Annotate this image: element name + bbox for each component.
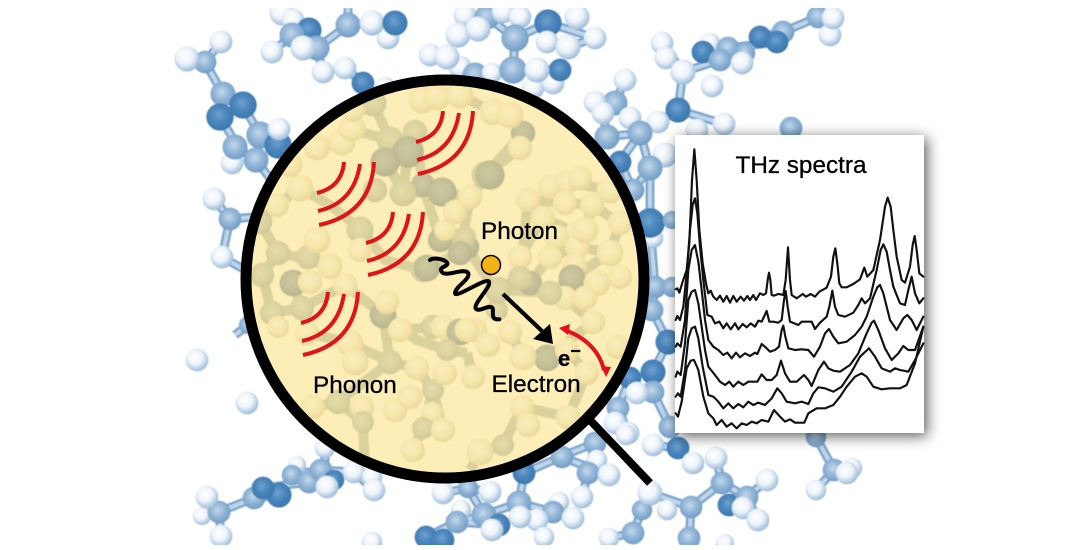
wave group middle xyxy=(366,212,423,275)
wave group top xyxy=(416,111,473,174)
icon: photon wavy line xyxy=(430,259,499,319)
label: electron symbol: e xyxy=(558,346,570,371)
label: Phonon: Phonon xyxy=(313,372,397,399)
magnifier lens xyxy=(246,80,644,478)
panel: THz spectra xyxy=(675,135,924,433)
lens ring xyxy=(246,80,644,478)
magnified molecule xyxy=(248,82,632,470)
arrow: red double-headed curved xyxy=(559,324,611,377)
chart: six stacked spectra lines xyxy=(676,149,923,428)
icon: photon ball xyxy=(482,256,500,274)
wave group bottom xyxy=(301,292,358,355)
heading: THz spectra: THz spectra xyxy=(736,152,867,179)
phonon waves xyxy=(301,111,473,355)
arrow: photon to electron xyxy=(503,294,553,344)
label: Photon: Photon xyxy=(481,218,558,245)
molecular structure background xyxy=(174,0,862,550)
label: electron symbol: − xyxy=(570,341,581,361)
magnifier handle xyxy=(588,418,650,483)
wave group left xyxy=(317,162,374,225)
label: Electron: Electron xyxy=(492,371,581,398)
